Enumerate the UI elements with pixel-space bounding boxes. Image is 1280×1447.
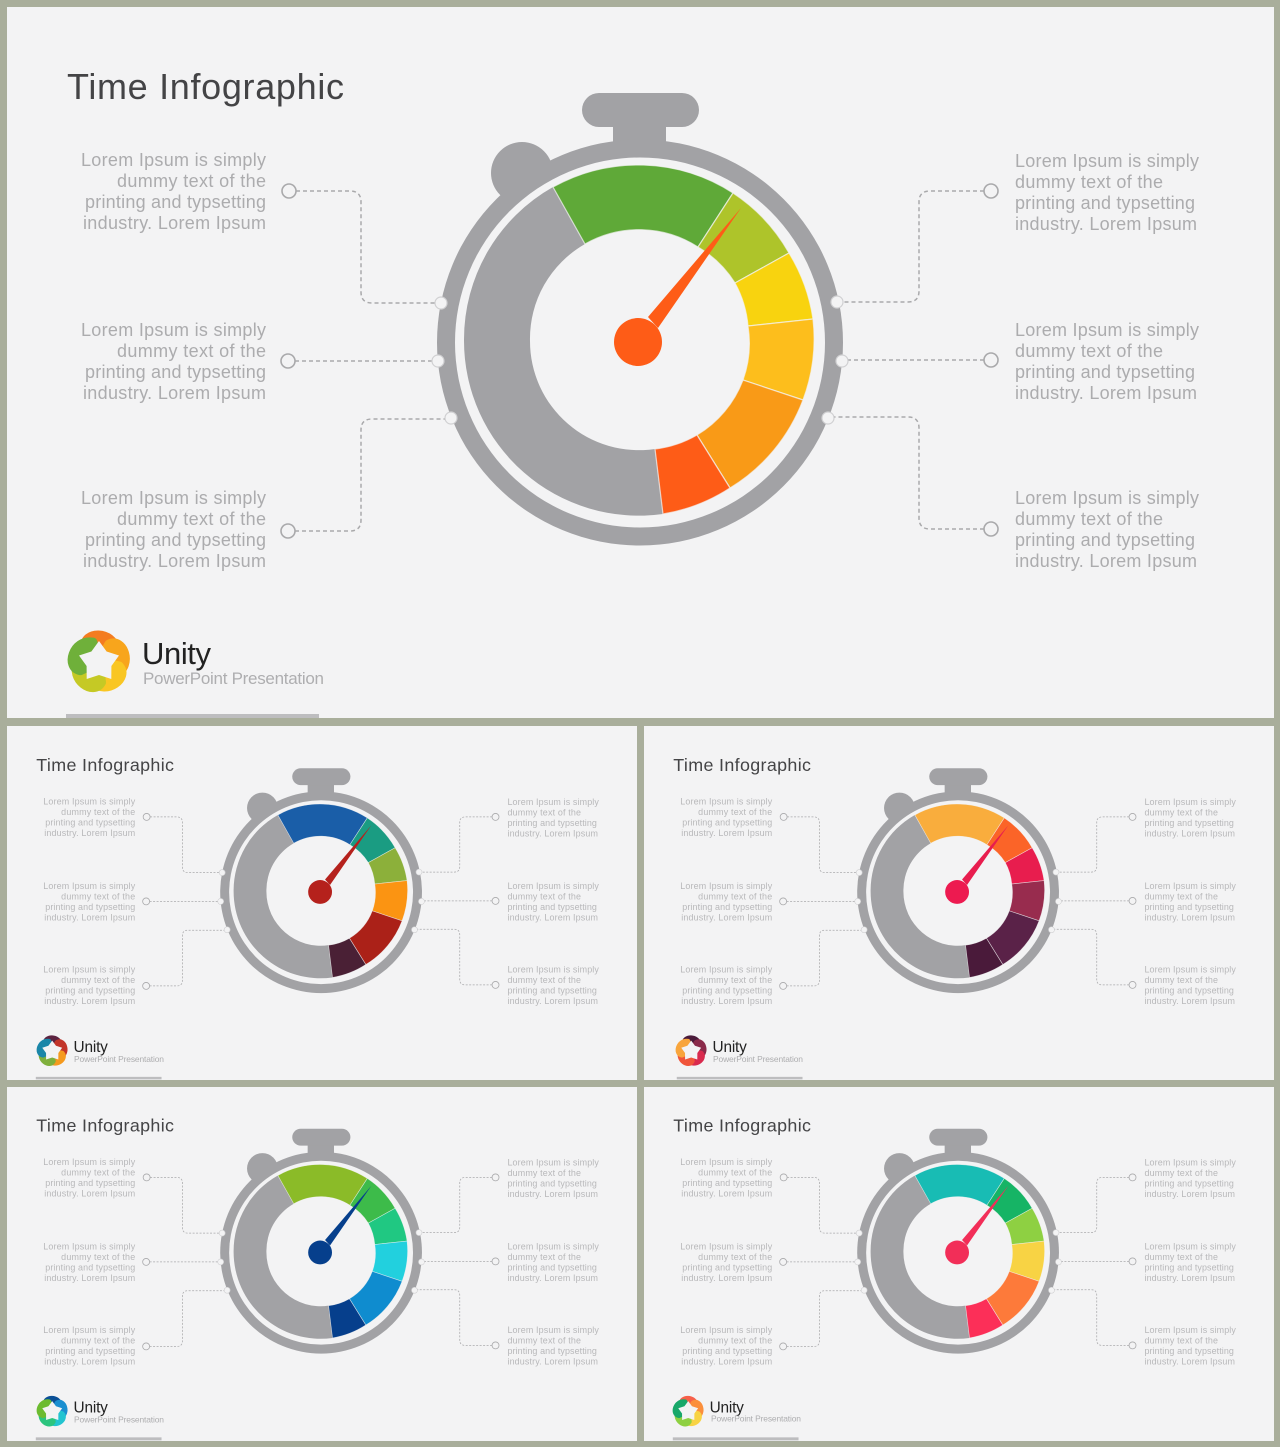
connectors — [780, 1174, 1136, 1350]
logo wordmark: PowerPoint Presentation — [143, 669, 324, 688]
text blocks: left column — [43, 797, 136, 1006]
text block: right bottom: printing and typsetting — [1015, 530, 1195, 550]
text blocks: right column: dummy text of the — [507, 975, 581, 985]
text block: left middle — [81, 320, 266, 403]
text blocks: left column: dummy text of the — [61, 807, 135, 817]
text blocks: left column: industry. Lorem Ipsum — [44, 1188, 135, 1198]
text block: left top: printing and typsetting — [85, 192, 266, 212]
text blocks: left column: industry. Lorem Ipsum — [681, 1273, 772, 1283]
text blocks: left column: Lorem Ipsum is simply — [680, 881, 773, 891]
text blocks: left column: dummy text of the — [61, 1335, 135, 1345]
text blocks: left column: printing and typsetting — [682, 1262, 772, 1272]
text blocks: right column: industry. Lorem Ipsum — [507, 996, 598, 1006]
title: Time Infographic — [67, 66, 344, 107]
text blocks: left column: dummy text of the — [698, 1335, 772, 1345]
text blocks: right column: dummy text of the — [1144, 891, 1218, 901]
text blocks: left column: dummy text of the — [698, 1252, 772, 1262]
text blocks: left column: industry. Lorem Ipsum — [44, 1356, 135, 1366]
text blocks: right column: printing and typsetting — [1144, 1346, 1234, 1356]
text block: right top — [1015, 151, 1199, 234]
text block: right middle: Lorem Ipsum is simply — [1015, 320, 1199, 340]
connectors — [143, 813, 499, 989]
text blocks: right column: printing and typsetting — [1144, 902, 1234, 912]
stopwatch gauge — [857, 1129, 1059, 1354]
text block: right top: printing and typsetting — [1015, 193, 1195, 213]
text blocks: right column: dummy text of the — [507, 1335, 581, 1345]
text blocks: left column: printing and typsetting — [682, 1346, 772, 1356]
text blocks: left column: dummy text of the — [61, 1252, 135, 1262]
text blocks: right column: printing and typsetting — [507, 985, 597, 995]
logo: ribbon star — [673, 1398, 704, 1427]
text blocks: left column: Lorem Ipsum is simply — [43, 1241, 136, 1251]
text blocks: left column: printing and typsetting — [45, 817, 135, 827]
text blocks: right column: dummy text of the — [507, 1252, 581, 1262]
title: Time Infographic — [673, 755, 811, 775]
text blocks: left column: printing and typsetting — [682, 817, 772, 827]
logo wordmark: PowerPoint Presentation — [713, 1054, 803, 1064]
text blocks: left column: dummy text of the — [61, 975, 135, 985]
text block: left bottom: printing and typsetting — [85, 530, 266, 550]
logo wordmark — [74, 1039, 164, 1064]
text blocks: right column: dummy text of the — [1144, 975, 1218, 985]
text block: left bottom: industry. Lorem Ipsum — [83, 551, 266, 571]
text blocks: left column: dummy text of the — [698, 891, 772, 901]
text block: right top: industry. Lorem Ipsum — [1015, 214, 1197, 234]
text blocks: right column: Lorem Ipsum is simply — [507, 797, 599, 807]
logo wordmark: PowerPoint Presentation — [74, 1054, 164, 1064]
text blocks: left column: industry. Lorem Ipsum — [44, 1273, 135, 1283]
text blocks: left column: dummy text of the — [698, 807, 772, 817]
logo wordmark — [142, 636, 324, 688]
stopwatch gauge — [220, 1129, 422, 1354]
text blocks: left column: Lorem Ipsum is simply — [43, 964, 136, 974]
text blocks: right column: Lorem Ipsum is simply — [1144, 964, 1236, 974]
text blocks: right column: printing and typsetting — [1144, 1178, 1234, 1188]
text blocks: left column: Lorem Ipsum is simply — [43, 797, 136, 807]
text blocks: right column: printing and typsetting — [1144, 985, 1234, 995]
text blocks: left column: industry. Lorem Ipsum — [681, 1188, 772, 1198]
stopwatch gauge — [857, 768, 1059, 993]
panel: blue variant — [7, 726, 637, 1080]
text blocks: left column: Lorem Ipsum is simply — [43, 881, 136, 891]
logo wordmark: Unity — [713, 1039, 747, 1056]
text blocks: left column: printing and typsetting — [45, 902, 135, 912]
text block: left middle: dummy text of the — [117, 341, 266, 361]
text blocks: right column: Lorem Ipsum is simply — [1144, 1157, 1236, 1167]
logo wordmark — [713, 1039, 803, 1064]
connectors — [143, 1174, 499, 1350]
text blocks: right column: dummy text of the — [1144, 807, 1218, 817]
text block: right bottom: Lorem Ipsum is simply — [1015, 488, 1199, 508]
text blocks: right column: Lorem Ipsum is simply — [1144, 1241, 1236, 1251]
panel: green-blue variant — [7, 1087, 637, 1441]
text blocks: right column: dummy text of the — [507, 891, 581, 901]
text block: left bottom — [81, 488, 266, 571]
text block: left bottom: dummy text of the — [117, 509, 266, 529]
text blocks: left column: industry. Lorem Ipsum — [681, 912, 772, 922]
text blocks: right column: dummy text of the — [1144, 1252, 1218, 1262]
text blocks: right column: industry. Lorem Ipsum — [1144, 1189, 1235, 1199]
logo wordmark — [710, 1400, 801, 1423]
text block: left top — [81, 150, 266, 233]
text blocks: right column: printing and typsetting — [507, 1262, 597, 1272]
logo wordmark: Unity — [142, 636, 212, 671]
text blocks: left column: industry. Lorem Ipsum — [681, 1356, 772, 1366]
text blocks: right column: industry. Lorem Ipsum — [507, 1189, 598, 1199]
text blocks: right column: dummy text of the — [507, 807, 581, 817]
text block: left middle: printing and typsetting — [85, 362, 266, 382]
text blocks: right column: dummy text of the — [1144, 1335, 1218, 1345]
text blocks: left column: industry. Lorem Ipsum — [44, 828, 135, 838]
text blocks: left column — [43, 1157, 136, 1366]
panel: crimson variant — [644, 726, 1274, 1080]
text block: right bottom: industry. Lorem Ipsum — [1015, 551, 1197, 571]
text block: left middle: industry. Lorem Ipsum — [83, 383, 266, 403]
text blocks: right column — [507, 1157, 599, 1366]
text block: left bottom: Lorem Ipsum is simply — [81, 488, 266, 508]
title: Time Infographic — [36, 755, 174, 775]
text blocks: left column: dummy text of the — [61, 1167, 135, 1177]
text blocks: left column: dummy text of the — [61, 891, 135, 901]
logo wordmark: Unity — [74, 1039, 108, 1056]
text blocks: right column: industry. Lorem Ipsum — [507, 828, 598, 838]
text blocks: left column: industry. Lorem Ipsum — [681, 996, 772, 1006]
text blocks: right column: printing and typsetting — [507, 902, 597, 912]
title: Time Infographic — [36, 1116, 174, 1136]
text blocks: left column: printing and typsetting — [45, 1346, 135, 1356]
text blocks: right column: Lorem Ipsum is simply — [507, 964, 599, 974]
text block: left top: industry. Lorem Ipsum — [83, 213, 266, 233]
connector: right middle — [836, 353, 998, 367]
text block: right middle: industry. Lorem Ipsum — [1015, 383, 1197, 403]
connectors — [780, 813, 1136, 989]
logo wordmark: Unity — [710, 1400, 744, 1417]
text blocks: left column: industry. Lorem Ipsum — [44, 912, 135, 922]
text blocks: right column — [1144, 1157, 1236, 1366]
text blocks: left column: printing and typsetting — [682, 1178, 772, 1188]
text blocks: right column: Lorem Ipsum is simply — [1144, 1325, 1236, 1335]
text blocks: right column: dummy text of the — [1144, 1168, 1218, 1178]
connector: right top — [831, 184, 998, 308]
panel: teal-coral variant — [644, 1087, 1274, 1441]
stopwatch gauge — [220, 768, 422, 993]
text blocks: right column: dummy text of the — [507, 1168, 581, 1178]
text blocks: right column: industry. Lorem Ipsum — [1144, 1356, 1235, 1366]
logo wordmark: PowerPoint Presentation — [711, 1413, 801, 1423]
text blocks: right column: industry. Lorem Ipsum — [1144, 1273, 1235, 1283]
text blocks: right column: industry. Lorem Ipsum — [507, 912, 598, 922]
text block: left top: Lorem Ipsum is simply — [81, 150, 266, 170]
text blocks: left column — [680, 797, 773, 1006]
text blocks: right column: industry. Lorem Ipsum — [507, 1273, 598, 1283]
stopwatch gauge — [437, 93, 843, 546]
text blocks: right column — [507, 797, 599, 1006]
text blocks: right column: Lorem Ipsum is simply — [507, 881, 599, 891]
logo wordmark — [74, 1400, 164, 1424]
logo wordmark: Unity — [74, 1400, 108, 1417]
text block: right middle: printing and typsetting — [1015, 362, 1195, 382]
connector: left bottom — [281, 412, 457, 538]
text blocks: right column: Lorem Ipsum is simply — [507, 1241, 599, 1251]
text blocks: left column: printing and typsetting — [45, 1262, 135, 1272]
text blocks: right column: printing and typsetting — [507, 1178, 597, 1188]
text blocks: left column: printing and typsetting — [682, 985, 772, 995]
text blocks: left column: dummy text of the — [698, 975, 772, 985]
text blocks: left column: Lorem Ipsum is simply — [680, 797, 773, 807]
logo: ribbon star — [37, 1398, 68, 1427]
text blocks: right column: Lorem Ipsum is simply — [507, 1157, 599, 1167]
text blocks: right column: printing and typsetting — [507, 1346, 597, 1356]
connector: right bottom — [822, 412, 998, 536]
text blocks: left column — [680, 1157, 773, 1366]
text block: left middle: Lorem Ipsum is simply — [81, 320, 266, 340]
logo: ribbon star — [37, 1038, 68, 1067]
text blocks: right column: Lorem Ipsum is simply — [507, 1325, 599, 1335]
text block: left top: dummy text of the — [117, 171, 266, 191]
text blocks: right column: printing and typsetting — [1144, 1262, 1234, 1272]
text blocks: left column: printing and typsetting — [682, 902, 772, 912]
text blocks: right column — [1144, 797, 1236, 1006]
text blocks: right column: Lorem Ipsum is simply — [1144, 797, 1236, 807]
panel: main slide — [7, 7, 1274, 718]
logo wordmark: PowerPoint Presentation — [74, 1414, 164, 1424]
text blocks: left column: printing and typsetting — [45, 1178, 135, 1188]
text block: right bottom: dummy text of the — [1015, 509, 1163, 529]
title: Time Infographic — [673, 1116, 811, 1136]
text block: right top: Lorem Ipsum is simply — [1015, 151, 1199, 171]
text blocks: right column: printing and typsetting — [1144, 818, 1234, 828]
text blocks: right column: industry. Lorem Ipsum — [507, 1356, 598, 1366]
text block: right bottom — [1015, 488, 1199, 571]
logo: ribbon star — [676, 1038, 707, 1067]
connector: left top — [282, 184, 447, 309]
text blocks: left column: printing and typsetting — [45, 985, 135, 995]
text blocks: right column: industry. Lorem Ipsum — [1144, 996, 1235, 1006]
logo: ribbon star — [69, 635, 130, 694]
text blocks: right column: Lorem Ipsum is simply — [1144, 881, 1236, 891]
text blocks: left column: Lorem Ipsum is simply — [680, 1241, 773, 1251]
text blocks: right column: industry. Lorem Ipsum — [1144, 828, 1235, 838]
text blocks: right column: industry. Lorem Ipsum — [1144, 912, 1235, 922]
text blocks: left column: Lorem Ipsum is simply — [680, 964, 773, 974]
text blocks: right column: printing and typsetting — [507, 818, 597, 828]
text block: right middle — [1015, 320, 1199, 403]
text blocks: left column: industry. Lorem Ipsum — [681, 828, 772, 838]
text blocks: left column: dummy text of the — [698, 1167, 772, 1177]
connector: left middle — [281, 354, 444, 368]
text blocks: left column: Lorem Ipsum is simply — [43, 1157, 136, 1167]
text blocks: left column: Lorem Ipsum is simply — [43, 1325, 136, 1335]
text blocks: left column: Lorem Ipsum is simply — [680, 1157, 773, 1167]
text blocks: left column: Lorem Ipsum is simply — [680, 1325, 773, 1335]
text blocks: left column: industry. Lorem Ipsum — [44, 996, 135, 1006]
text block: right middle: dummy text of the — [1015, 341, 1163, 361]
text block: right top: dummy text of the — [1015, 172, 1163, 192]
